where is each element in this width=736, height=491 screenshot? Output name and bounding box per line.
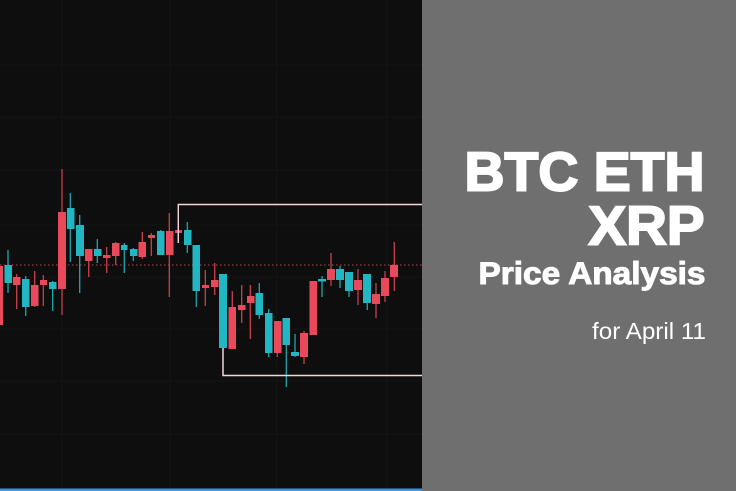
lower range box line <box>223 348 422 376</box>
bottom blue bar <box>0 488 422 491</box>
red candle wicks <box>17 169 394 364</box>
teal candle bodies <box>4 208 371 356</box>
title: BTC ETH: BTC ETH <box>464 140 704 202</box>
teal candle wicks <box>8 193 367 387</box>
chart: candlesticks <box>0 169 422 387</box>
panel: title background <box>422 0 736 491</box>
upper range box line <box>178 204 422 243</box>
red candle bodies <box>0 212 398 357</box>
title: XRP: XRP <box>588 194 704 256</box>
price level dotted line <box>0 264 422 266</box>
panel: chart background <box>0 0 422 491</box>
date: for April 11: for April 11 <box>592 318 706 344</box>
subtitle: Price Analysis: Price Analysis <box>478 255 706 291</box>
